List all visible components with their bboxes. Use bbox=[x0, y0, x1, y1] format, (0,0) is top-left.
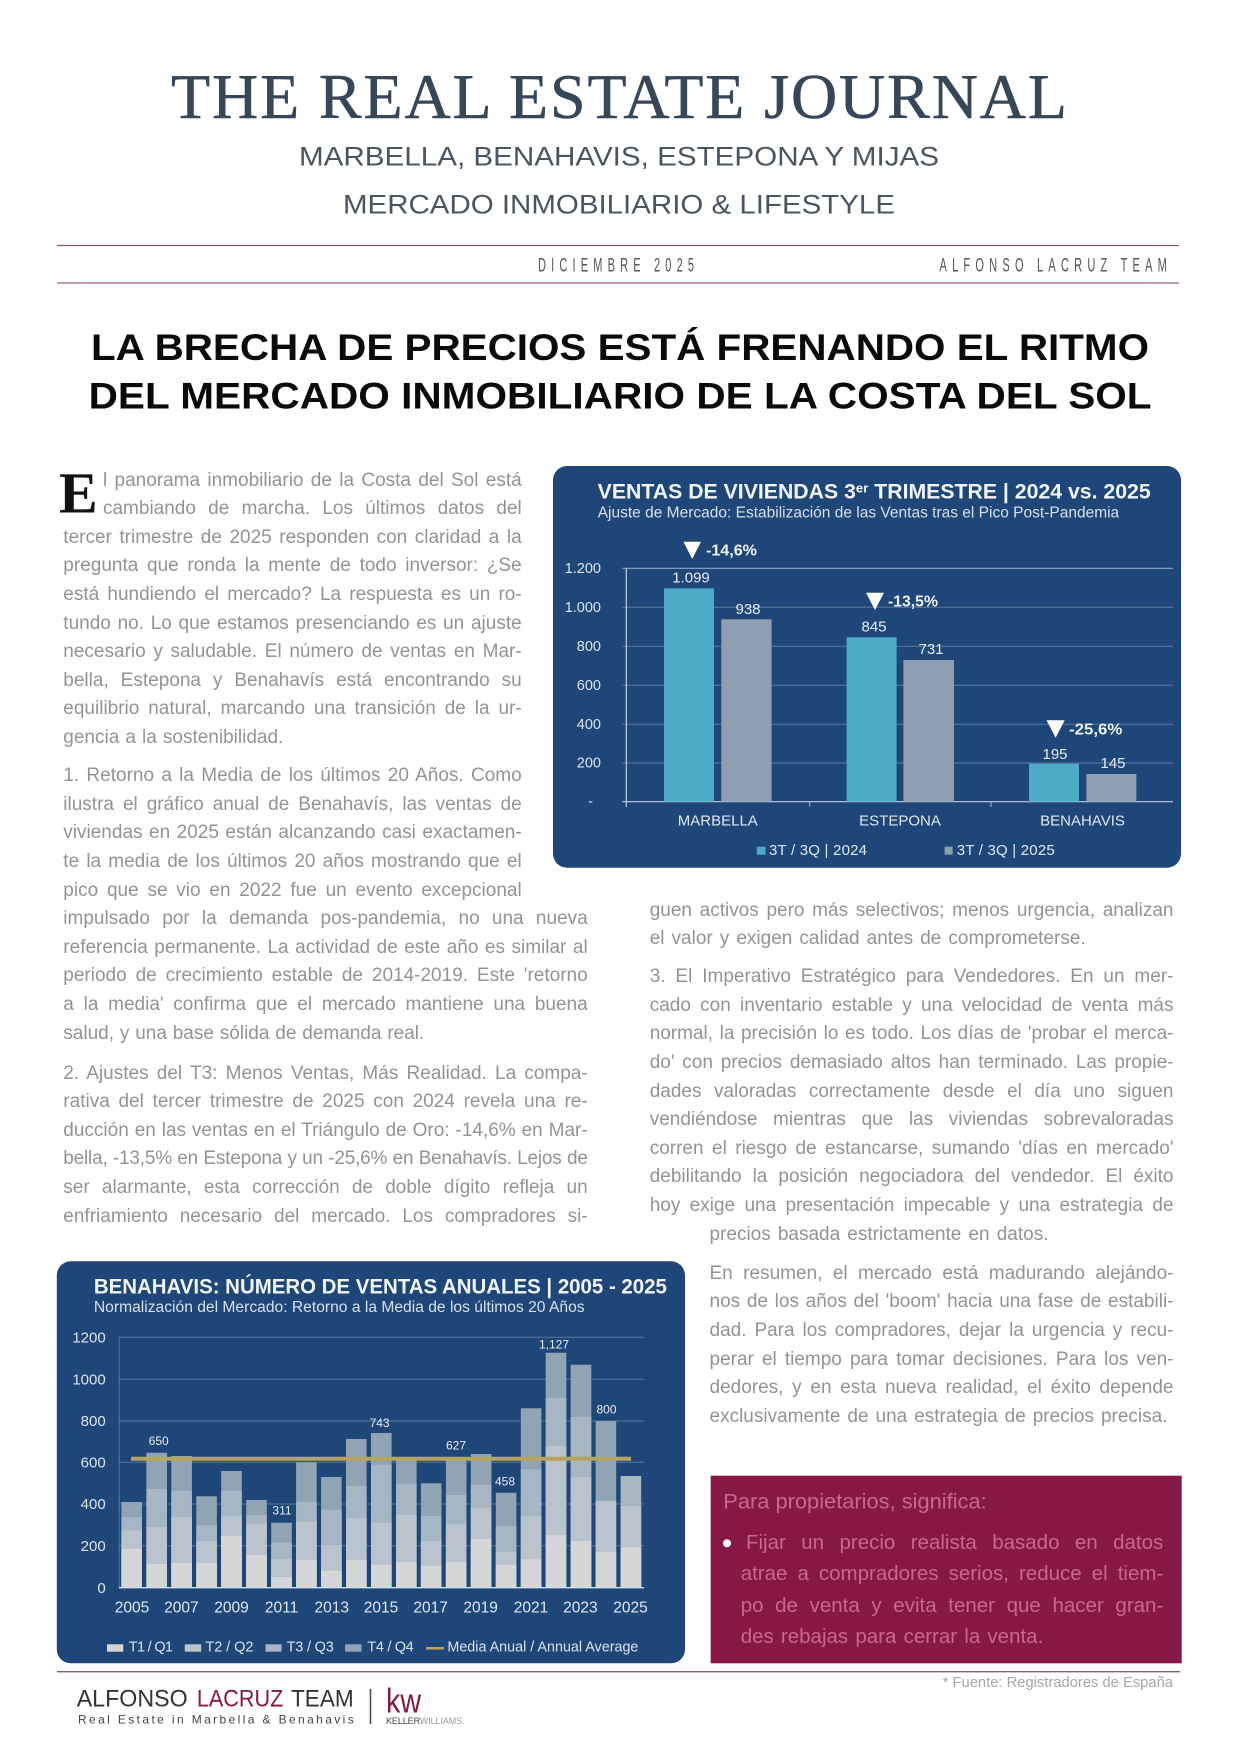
y axis labels: 0 bbox=[97, 1580, 106, 1597]
legend: T1 / Q1 bbox=[129, 1640, 173, 1656]
legend: 3T / 3Q | 2025 bbox=[957, 842, 1055, 859]
subtitle: topic: MERCADO INMOBILIARIO & LIFESTYLE bbox=[343, 189, 895, 219]
text block: point 3: dades valoradas correctamente desde el día uno siguen bbox=[650, 1081, 1173, 1102]
text block: point 1: salud, y una base sólida de demanda real. bbox=[63, 1023, 424, 1044]
text block: point 1: 1. Retorno a la Media de los últimos 20 Años. Como bbox=[63, 765, 522, 786]
value labels: 195 bbox=[1042, 746, 1068, 763]
series T2 bbox=[132, 1446, 631, 1588]
text block: point 1: ilustra el gráfico anual de Benahavís, las ventas de bbox=[63, 794, 522, 815]
callout body text: po de venta y evita tener que hacer gran- bbox=[741, 1594, 1163, 1617]
headline bbox=[89, 326, 1152, 416]
panel: owners callout background bbox=[711, 1476, 1182, 1663]
panel: quarterly sales chart bbox=[553, 466, 1181, 868]
text block: point 3: do' con precios demasiado altos han terminado. Las propie- bbox=[650, 1052, 1173, 1073]
value labels: 627 bbox=[446, 1438, 466, 1452]
text block: summary: exclusivamente de una estrategia de precios precisa. bbox=[710, 1406, 1168, 1427]
series T4 bbox=[132, 1353, 606, 1588]
text block: point 1: referencia permanente. La actividad de este año es similar al bbox=[63, 937, 588, 958]
text block: introduction: tundo no. Lo que estamos presenciando es un ajuste bbox=[63, 613, 522, 634]
change percentages: -13,5% bbox=[888, 594, 938, 611]
value labels: 743 bbox=[370, 1416, 390, 1430]
chart heading: BENAHAVIS: NÚMERO DE VENTAS ANUALES | 2005 - 2025 bbox=[94, 1274, 667, 1298]
text block: point 3: vendiéndose mientras que las viviendas sobrevaloradas bbox=[650, 1109, 1173, 1130]
text block: point 2: bella, -13,5% en Estepona y un -25,6% en Benahavís. Lejos de bbox=[63, 1148, 588, 1169]
y axis labels: 1000 bbox=[72, 1372, 106, 1388]
legend: Media Anual / Annual Average bbox=[447, 1640, 638, 1656]
bars 2024 bbox=[664, 588, 1079, 802]
bars 2025 bbox=[721, 619, 1136, 802]
text block: summary: dedores, y en esta nueva realidad, el éxito depende bbox=[710, 1377, 1174, 1398]
x axis labels: 2023 bbox=[563, 1599, 598, 1616]
subtitle: locations: MARBELLA, BENAHAVIS, ESTEPONA Y MIJAS bbox=[299, 142, 939, 172]
text block: point 2 continued: guen activos pero más selectivos; menos urgencia, analizan bbox=[650, 900, 1173, 921]
chart subheading: Normalización del Mercado: Retorno a la Media de los últimos 20 Años bbox=[94, 1299, 585, 1316]
y axis labels: 1.000 bbox=[565, 600, 601, 616]
chart heading: TRIMESTRE | 2024 vs. 2025 bbox=[868, 480, 1151, 503]
value labels bbox=[672, 570, 1126, 772]
y axis labels bbox=[72, 1330, 106, 1597]
x axis labels: 2013 bbox=[314, 1599, 349, 1616]
category labels bbox=[678, 813, 1125, 830]
text block: point 1: viviendas en 2025 están alcanzando casi exactamen- bbox=[63, 822, 522, 843]
text block: introduction: necesario y saludable. El número de ventas en Mar- bbox=[63, 641, 522, 662]
text block: point 3: 3. El Imperativo Estratégico para Vendedores. En un mer- bbox=[650, 966, 1173, 987]
text block: point 2 bbox=[63, 1063, 588, 1227]
y axis labels: 200 bbox=[577, 756, 601, 772]
text block: summary: perar el tiempo para tomar decisiones. Para los ven- bbox=[710, 1349, 1174, 1370]
value labels: 1.099 bbox=[672, 570, 710, 587]
text block: point 2: rativa del tercer trimestre de 2025 con 2024 revela una re- bbox=[63, 1091, 588, 1112]
text block: point 1: pico que se vio en 2022 fue un evento excepcional bbox=[63, 880, 522, 901]
masthead bbox=[171, 61, 1067, 219]
category labels: ESTEPONA bbox=[859, 813, 941, 830]
x axis labels: 2005 bbox=[115, 1599, 149, 1616]
text block: point 1 bbox=[63, 765, 588, 1044]
footer logo: kw bbox=[386, 1683, 421, 1721]
y axis labels: 600 bbox=[81, 1454, 106, 1472]
change markers bbox=[684, 542, 1065, 738]
legend: T2 / Q2 bbox=[205, 1640, 253, 1656]
text block: introduction: equilibrio natural, marcando una transición de la ur- bbox=[63, 698, 522, 719]
y axis labels: 800 bbox=[577, 639, 601, 655]
value labels: 938 bbox=[735, 601, 761, 618]
issue date: DICIEMBRE 2025 bbox=[538, 256, 694, 276]
chart heading: er bbox=[856, 480, 868, 495]
x axis labels: 2015 bbox=[364, 1599, 398, 1616]
text block: point 2 continued bbox=[650, 900, 1173, 949]
footer logo: TEAM bbox=[291, 1686, 354, 1713]
footer logo: Real Estate in Marbella & Benahavis bbox=[78, 1712, 354, 1726]
text block: point 1: a la media' confirma que el mercado mantiene una buena bbox=[63, 994, 588, 1015]
value labels: 1,127 bbox=[539, 1337, 569, 1351]
text block: point 3: corren el riesgo de estancarse, sumando 'días en mercado' bbox=[650, 1138, 1173, 1159]
footer logo: LACRUZ bbox=[197, 1686, 283, 1713]
chart subheading: Ajuste de Mercado: Estabilización de las Ventas tras el Pico Post-Pandemia bbox=[598, 505, 1120, 522]
x axis labels: 2011 bbox=[265, 1599, 298, 1616]
text block: introduction: cambiando de marcha. Los últimos datos del bbox=[103, 498, 522, 519]
text block: introduction: tercer trimestre de 2025 responden con claridad a la bbox=[63, 527, 522, 548]
value labels: 458 bbox=[495, 1475, 515, 1489]
y axis labels: 1.200 bbox=[565, 561, 601, 577]
footer logo bbox=[77, 1683, 465, 1726]
text block: point 1: te la media de los últimos 20 años mostrando que el bbox=[63, 851, 522, 872]
value labels: 800 bbox=[596, 1402, 617, 1416]
x axis labels: 2009 bbox=[214, 1599, 249, 1616]
y axis labels bbox=[565, 561, 601, 810]
y axis labels: 400 bbox=[577, 717, 601, 733]
footer logo: ALFONSO bbox=[77, 1686, 188, 1713]
legend: 3T / 3Q | 2024 bbox=[769, 842, 867, 859]
x axis labels: 2019 bbox=[463, 1599, 498, 1616]
value labels: 145 bbox=[1100, 755, 1126, 772]
text block: summary: nos de los años del 'boom' hacia una fase de estabili- bbox=[710, 1291, 1174, 1312]
x axis labels: 2017 bbox=[413, 1599, 448, 1616]
value labels: 845 bbox=[861, 619, 887, 636]
text block: point 3: normal, la precisión lo es todo. Los días de 'probar el merca- bbox=[650, 1023, 1173, 1044]
category labels: MARBELLA bbox=[678, 813, 758, 830]
text block: introduction: bella, Estepona y Benahavís está encontrando su bbox=[63, 670, 522, 691]
text block: summary: En resumen, el mercado está madurando alejándo- bbox=[710, 1263, 1174, 1284]
x axis labels: 2007 bbox=[164, 1599, 199, 1616]
x axis labels: 2025 bbox=[613, 1599, 648, 1616]
callout body text: des rebajas para cerrar la venta. bbox=[741, 1625, 1043, 1648]
callout body text bbox=[741, 1531, 1163, 1648]
chart heading: VENTAS DE VIVIENDAS 3 bbox=[598, 480, 853, 503]
y axis labels: 400 bbox=[81, 1496, 106, 1513]
change percentages bbox=[706, 543, 1123, 738]
footer logo: KELLERWILLIAMS. bbox=[386, 1716, 465, 1726]
stacked bars bbox=[132, 1353, 631, 1588]
source note: * Fuente: Registradores de España bbox=[943, 1674, 1174, 1691]
y axis labels: 600 bbox=[577, 678, 601, 694]
headline: DEL MERCADO INMOBILIARIO DE LA COSTA DEL SOL bbox=[89, 374, 1152, 416]
change percentages: -14,6% bbox=[706, 543, 757, 560]
value labels: 650 bbox=[149, 1434, 169, 1448]
callout body text: atrae a compradores serios, reduce el tiem- bbox=[741, 1562, 1163, 1585]
text block: point 3: precios basada estrictamente en datos. bbox=[709, 1224, 1048, 1245]
panel: annual sales chart bbox=[57, 1261, 685, 1663]
text block: point 3: hoy exige una presentación impecable y una estrategia de bbox=[650, 1195, 1173, 1216]
title: THE REAL ESTATE JOURNAL bbox=[171, 61, 1067, 132]
value labels bbox=[149, 1337, 617, 1517]
text block: point 2 continued: el valor y exigen calidad antes de comprometerse. bbox=[650, 928, 1086, 949]
text block: point 3: cado con inventario estable y una velocidad de venta más bbox=[650, 995, 1173, 1016]
value labels: 311 bbox=[272, 1503, 292, 1517]
legend bbox=[757, 842, 1055, 859]
text block: introduction: gencia a la sostenibilidad. bbox=[63, 727, 283, 748]
text block: introduction: está hundiendo el mercado? La respuesta es un ro- bbox=[63, 584, 522, 605]
callout body text: Fijar un precio realista basado en datos bbox=[746, 1531, 1163, 1554]
text block: summary bbox=[710, 1263, 1174, 1427]
headline: LA BRECHA DE PRECIOS ESTÁ FRENANDO EL RITMO bbox=[91, 326, 1149, 368]
value labels: 731 bbox=[918, 641, 944, 658]
y axis labels: 1200 bbox=[72, 1330, 106, 1346]
y axis labels: 200 bbox=[81, 1538, 106, 1555]
text block: point 1: impulsado por la demanda pos-pandemia, no una nueva bbox=[63, 908, 588, 929]
text block: introduction: l panorama inmobiliario de la Costa del Sol está bbox=[103, 470, 522, 491]
text block: point 2: ducción en las ventas en el Triángulo de Oro: -14,6% en Mar- bbox=[63, 1120, 588, 1141]
x axis labels: 2021 bbox=[514, 1599, 548, 1616]
series T1 bbox=[132, 1535, 631, 1588]
average line bbox=[131, 1457, 631, 1461]
text block: point 2: 2. Ajustes del T3: Menos Ventas, Más Realidad. La compa- bbox=[63, 1063, 588, 1084]
legend: T3 / Q3 bbox=[287, 1640, 334, 1656]
y axis labels: 800 bbox=[81, 1413, 106, 1430]
legend bbox=[107, 1640, 638, 1656]
callout bullet bbox=[723, 1539, 731, 1547]
text block: point 3 bbox=[650, 966, 1173, 1245]
text block: summary: dad. Para los compradores, dejar la urgencia y recu- bbox=[710, 1320, 1174, 1341]
text block: point 2: enfriamiento necesario del mercado. Los compradores si- bbox=[63, 1206, 588, 1227]
team name: ALFONSO LACRUZ TEAM bbox=[940, 256, 1167, 276]
x axis labels bbox=[115, 1599, 648, 1616]
y axis labels: - bbox=[588, 794, 593, 810]
legend: T4 / Q4 bbox=[367, 1640, 414, 1656]
text block: point 2: ser alarmante, esta corrección de doble dígito refleja un bbox=[63, 1177, 588, 1198]
text block: point 1: periodo de crecimiento estable de 2014-2019. Este 'retorno bbox=[63, 965, 588, 986]
callout heading: Para propietarios, significa: bbox=[723, 1490, 987, 1513]
series T3 bbox=[132, 1398, 631, 1588]
text block: point 3: debilitando la posición negociadora del vendedor. El éxito bbox=[650, 1166, 1173, 1187]
text block: introduction bbox=[63, 470, 522, 748]
change percentages: -25,6% bbox=[1069, 721, 1123, 738]
text block: introduction: pregunta que ronda la mente de todo inversor: ¿Se bbox=[63, 555, 522, 576]
category labels: BENAHAVIS bbox=[1040, 813, 1125, 830]
drop cap: E bbox=[59, 461, 98, 526]
